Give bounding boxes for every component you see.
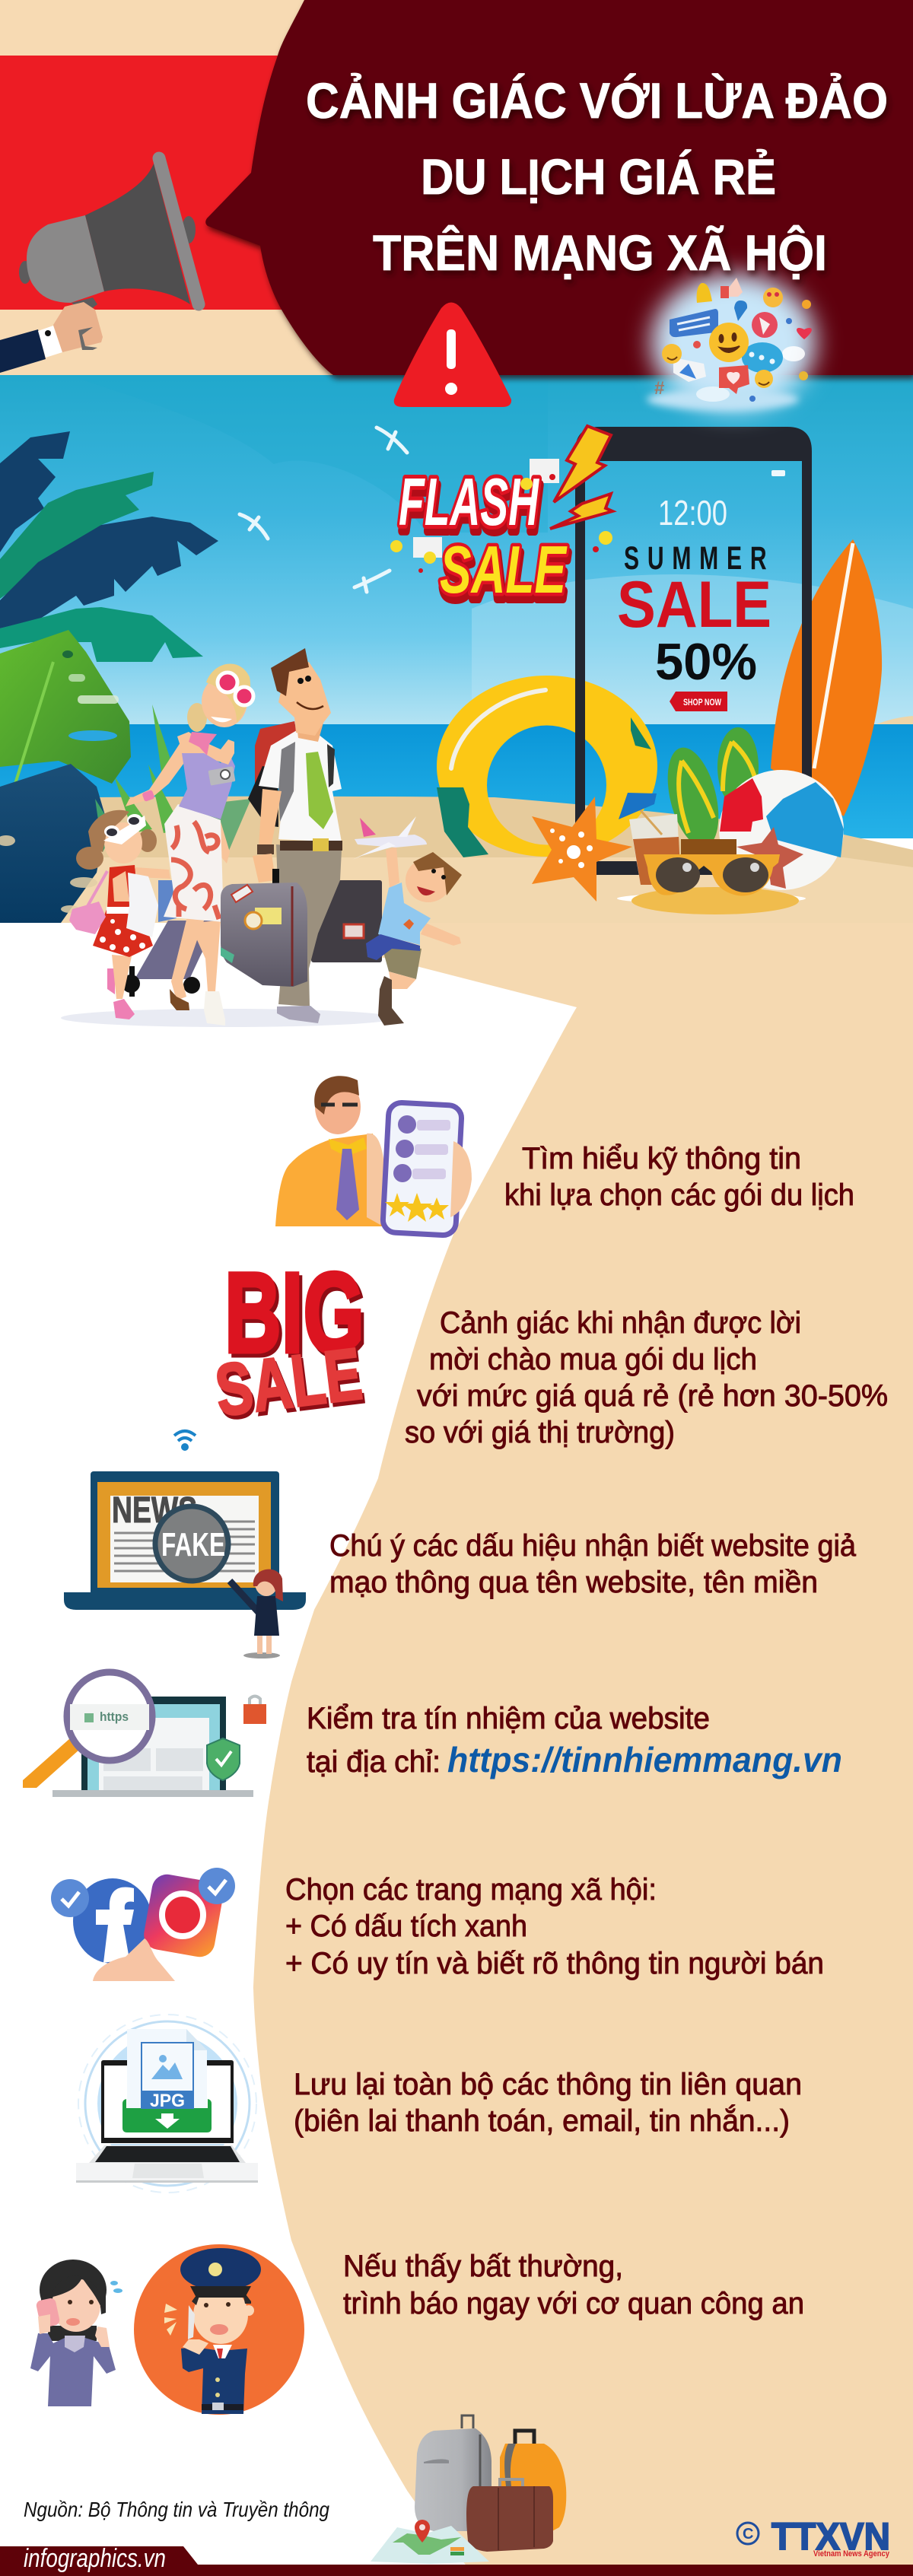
- sunglasses: [644, 854, 780, 896]
- icon: laptop jpg download: [76, 2015, 258, 2193]
- phone: SUMMER: [624, 539, 767, 576]
- phone: 50%: [655, 633, 757, 691]
- beach ball: [719, 770, 844, 890]
- text: step 1: Tìm hiểu kỹ thông tin: [522, 1142, 801, 1175]
- sand pile: [617, 887, 806, 914]
- phone: 12:00: [658, 493, 727, 533]
- rear suitcase: [311, 880, 382, 962]
- icon: verified facebook and instagram: [51, 1868, 235, 1981]
- text: step 5: + Có uy tín và biết rõ thông tin người bán: [285, 1947, 824, 1980]
- text: step 4: Kiểm tra tín nhiệm của website: [307, 1702, 710, 1735]
- text: step 5: Chọn các trang mạng xã hội:: [285, 1873, 657, 1907]
- icon: worried woman: [30, 2260, 122, 2406]
- text: step 3: [329, 1529, 857, 1599]
- text: step 2: [405, 1306, 888, 1449]
- drink: [619, 793, 736, 885]
- birds: [240, 428, 407, 592]
- icon: big sale: SALE: [214, 1337, 368, 1436]
- icon: laptop jpg download: JPG: [150, 2091, 185, 2111]
- icon: big sale: BIG: [224, 1248, 364, 1376]
- flip flops: [659, 727, 759, 852]
- cream lower background: [0, 923, 913, 2576]
- hero beach scene: [0, 375, 913, 923]
- title text: [306, 72, 888, 281]
- text: step 5: [285, 1873, 824, 1980]
- step 2: big sale: [212, 1248, 888, 1449]
- text: step 4: tại địa chỉ:: [307, 1745, 441, 1779]
- step 4: check trust: [23, 1672, 842, 1797]
- phone: [575, 427, 812, 875]
- icon: wifi: [174, 1431, 196, 1449]
- text: step 2: so với giá thị trường): [405, 1416, 675, 1449]
- text: step 3: Chú ý các dấu hiệu nhận biết website giả: [329, 1529, 857, 1563]
- icon: laptop with fake news: FAKE: [161, 1526, 225, 1563]
- logo: TTXVN: C: [743, 2526, 753, 2543]
- swim ring: [437, 676, 657, 857]
- rolling suitcase: [122, 880, 218, 997]
- text: step 1: khi lựa chọn các gói du lịch: [504, 1178, 854, 1212]
- text: step 6: (biên lai thanh toán, email, tin nhắn...): [294, 2104, 790, 2138]
- logo: TTXVN: Vietnam News Agency: [813, 2549, 890, 2559]
- icon: laptop with fake news: [64, 1471, 306, 1617]
- text: step 2: Cảnh giác khi nhận được lời: [440, 1306, 801, 1340]
- icon: social media cluster: [647, 274, 816, 411]
- text: step 6: [294, 2068, 802, 2138]
- icon: police officer on phone: [134, 2244, 304, 2415]
- icon: warning triangle: [394, 303, 511, 407]
- lower palm leaves: [0, 630, 251, 923]
- title text: DU LỊCH GIÁ RẺ: [421, 148, 776, 205]
- icon: man with checklist phone: [275, 1076, 472, 1236]
- text: step 7: [343, 2250, 804, 2320]
- text: step 2: mời chào mua gói du lịch: [429, 1343, 757, 1376]
- footer band: [0, 2546, 913, 2576]
- step 6: save records: [76, 2015, 802, 2193]
- icon: megaphone: [0, 158, 199, 373]
- starfish: [532, 797, 803, 902]
- step 5: verified accounts: [51, 1868, 824, 1981]
- header background: [0, 0, 913, 375]
- title shape: [205, 0, 913, 375]
- flash sale badge: FLASH: [400, 470, 542, 545]
- foreground sand: [0, 857, 913, 923]
- text: step 3: mạo thông qua tên website, tên miền: [329, 1566, 818, 1599]
- text: step 4: https://tinnhiemmang.vn: [447, 1740, 842, 1779]
- phone: SALE: [617, 568, 771, 641]
- icon: big sale: BIG: [227, 1252, 367, 1380]
- title text: TRÊN MẠNG XÃ HỘI: [373, 224, 827, 281]
- toy plane: [352, 816, 427, 860]
- icon: social media cluster: #: [654, 378, 664, 399]
- icon: luggage and map: [371, 2415, 566, 2564]
- text: step 7: trình báo ngay với cơ quan công an: [343, 2287, 804, 2320]
- text: step 1: [504, 1142, 854, 1212]
- icon: woman inspector: [243, 1569, 283, 1658]
- logo: TTXVN: TTXVN: [771, 2515, 890, 2558]
- step 3: fake news: [64, 1431, 857, 1658]
- mother: [126, 663, 253, 1026]
- upper palm leaves: [0, 431, 218, 662]
- footer site name: infographics.vn: [24, 2544, 166, 2573]
- step 7: report: [30, 2244, 804, 2415]
- phone: SHOP NOW: [683, 697, 722, 708]
- source: Nguồn: Bộ Thông tin và Truyền thông: [24, 2498, 329, 2521]
- girl: [69, 810, 170, 1019]
- flash sale badge: FLASH: [399, 464, 540, 539]
- step 1: research: [275, 1076, 854, 1236]
- icon: big sale: SALE: [212, 1333, 366, 1432]
- father: [248, 648, 342, 1023]
- icon: secure website magnifier: https: [100, 1709, 129, 1724]
- icon: laptop with fake news: NEWS: [112, 1490, 197, 1531]
- icon: big sale: [212, 1248, 368, 1436]
- text: step 6: Lưu lại toàn bộ các thông tin liên quan: [294, 2068, 802, 2101]
- flash sale badge: SALE: [441, 538, 569, 613]
- surfboard: [771, 539, 882, 816]
- flash sale badge: SALE: [440, 532, 568, 607]
- flash sale badge: [390, 426, 612, 613]
- text: step 2: với mức giá quá rẻ (rẻ hơn 30-50%: [417, 1379, 888, 1413]
- boy: [366, 847, 462, 1026]
- text: step 5: + Có dấu tích xanh: [285, 1910, 527, 1943]
- text: step 7: Nếu thấy bất thường,: [343, 2250, 623, 2283]
- text: step 4: [307, 1702, 842, 1779]
- icon: secure website magnifier: [23, 1672, 266, 1797]
- family illustration: [61, 648, 462, 1027]
- front suitcase: [221, 869, 307, 987]
